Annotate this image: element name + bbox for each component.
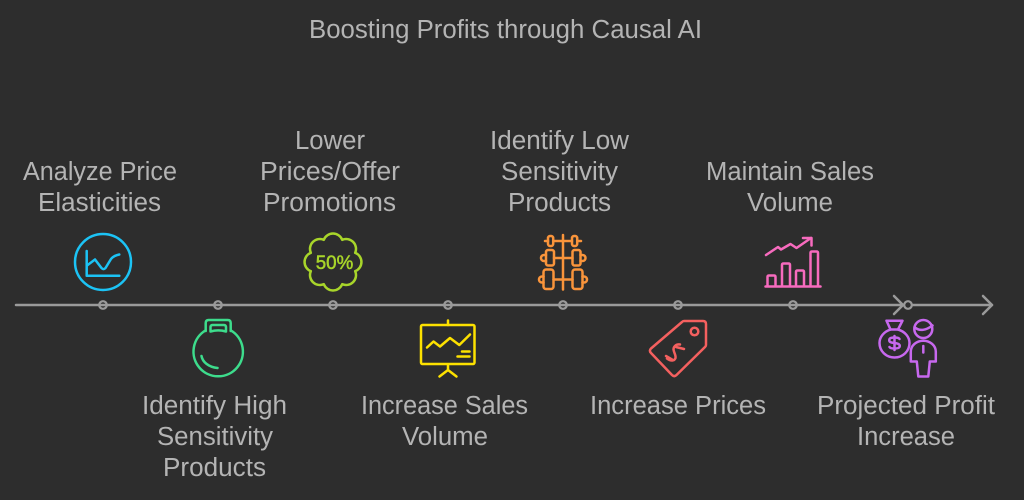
label: maintain sales volume: Volume: [747, 189, 833, 217]
label: identify low sensitivity products: Identify Low: [490, 127, 630, 155]
label: increase prices: Increase Prices: [590, 392, 766, 420]
timeline arrow: [16, 296, 992, 314]
icon: price tag: [650, 321, 706, 376]
step 5: identify low sensitivity products: [490, 127, 630, 290]
label: analyze price elasticities: Elasticities: [38, 189, 161, 217]
icon: presentation board: [421, 320, 474, 376]
label: increase sales volume: Increase Sales: [361, 392, 528, 420]
label: projected profit increase: Projected Profit: [817, 392, 995, 420]
label: maintain sales volume: [706, 158, 874, 217]
icon: money bag and person: [880, 320, 936, 376]
icon text: 50%: 50%: [316, 253, 353, 274]
icon: chart in circle: [75, 234, 131, 290]
label: projected profit increase: Increase: [857, 423, 955, 451]
step 3: lower prices / offer promotions: [260, 127, 401, 290]
label: identify low sensitivity products: Products: [508, 189, 611, 217]
step 7: maintain sales volume: [706, 158, 874, 286]
label: lower prices offer promotions: Prices/Offer: [260, 158, 401, 186]
label: identify high sensitivity products: Identify High: [142, 392, 287, 420]
title: Boosting Profits through Causal AI: [309, 16, 702, 44]
icon: 50% badge: [305, 234, 361, 290]
label: analyze price elasticities: [23, 158, 177, 217]
step 8: projected profit increase: [817, 320, 995, 451]
label: identify high sensitivity products: [142, 392, 287, 482]
label: increase sales volume: Volume: [402, 423, 488, 451]
step 6: increase prices: [590, 321, 766, 420]
icon: rising bar chart: [766, 238, 820, 286]
icon: kettlebell: [193, 320, 243, 376]
icon: dumbbell rack: [539, 235, 587, 290]
label: lower prices offer promotions: Promotions: [263, 189, 396, 217]
step 1: analyze price elasticities: [23, 158, 177, 290]
label: identify high sensitivity products: Products: [163, 454, 266, 482]
label: identify high sensitivity products: Sensitivity: [157, 423, 273, 451]
label: analyze price elasticities: Analyze Price: [23, 158, 177, 186]
label: identify low sensitivity products: Sensitivity: [501, 158, 618, 186]
label: maintain sales volume: Maintain Sales: [706, 158, 874, 186]
label: identify low sensitivity products: [490, 127, 630, 217]
label: lower prices offer promotions: [260, 127, 401, 217]
step 2: identify high sensitivity products: [142, 320, 287, 482]
step 4: increase sales volume: [361, 320, 528, 451]
label: lower prices offer promotions: Lower: [295, 127, 366, 155]
label: increase sales volume: [361, 392, 528, 451]
label: projected profit increase: [817, 392, 995, 451]
